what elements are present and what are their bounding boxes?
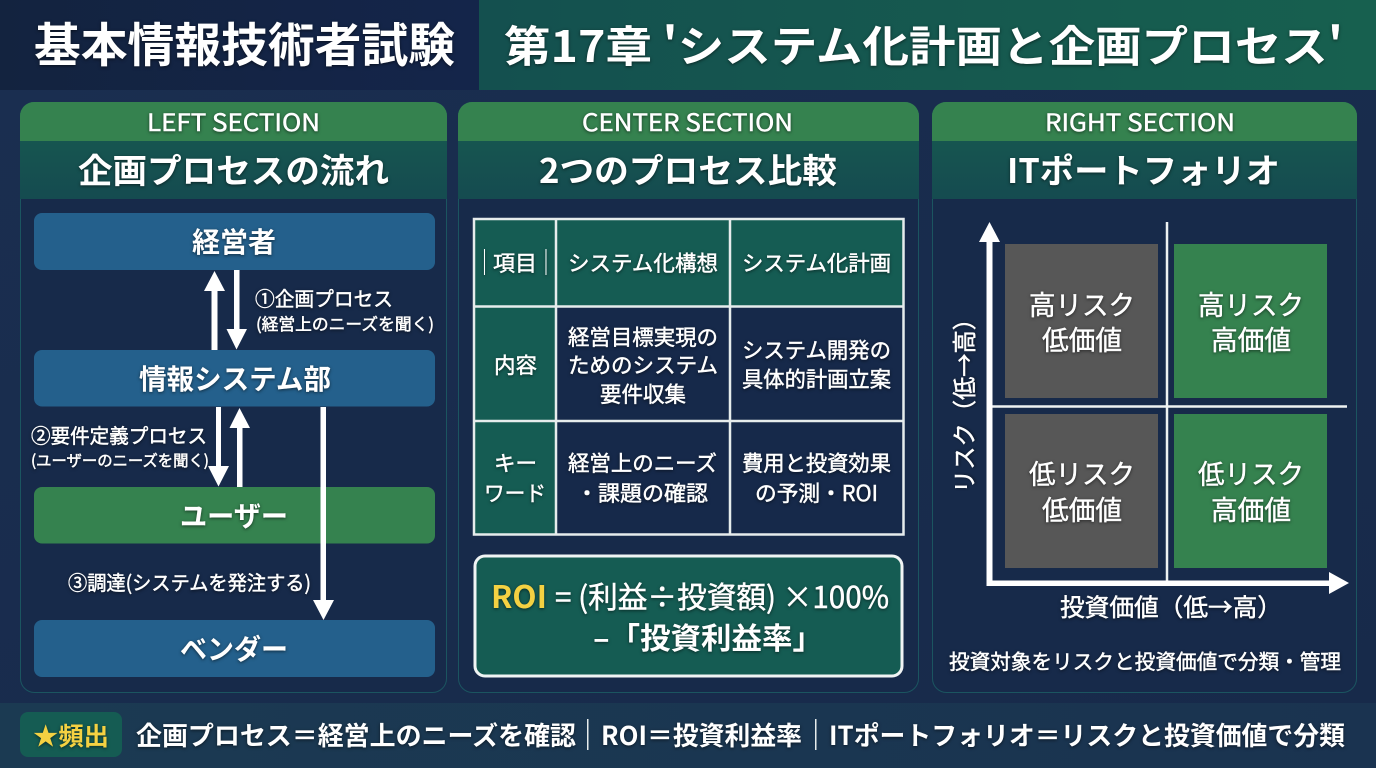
panel: left section	[20, 102, 447, 692]
arrow: down to ユーザー	[208, 407, 229, 486]
title: chapter: 第17章 'システム化計画と企画プロセス'	[504, 13, 1343, 75]
table header row: 項目	[493, 247, 537, 278]
table row: 内容: 要件収集	[600, 378, 686, 409]
label: 企画プロセス: ①企画プロセス	[255, 283, 393, 312]
table row: キーワード: の予測・ROI	[755, 477, 878, 508]
table row: キーワード: 費用と投資効果	[742, 447, 891, 478]
footer key point: ROI: ROI＝投資利益率	[601, 716, 802, 753]
header bar	[0, 0, 1376, 90]
quadrant: 高リスク高価値: 高リスク	[1198, 284, 1304, 323]
quadrant: 低リスク高価値	[1174, 414, 1327, 568]
axis label: value: 投資価値（低→高）	[1060, 589, 1282, 624]
callout: ROI formula	[475, 556, 902, 676]
footer bar	[0, 703, 1376, 768]
box: ユーザー: ユーザー	[180, 495, 288, 535]
quadrant: 高リスク低価値: 低価値	[1042, 319, 1122, 358]
box: 経営者: 経営者	[192, 221, 276, 261]
quadrant: 高リスク低価値: 高リスク	[1029, 284, 1135, 323]
section label: CENTER SECTION	[582, 103, 793, 138]
table header row	[471, 243, 891, 280]
quadrant: 高リスク低価値	[1005, 244, 1158, 398]
heading: 2つのプロセス比較	[539, 144, 837, 193]
table header row: システム化計画	[742, 247, 891, 278]
arrow: up to 情報システム部	[230, 408, 250, 487]
label: 企画プロセス: (経営上のニーズを聞く)	[256, 311, 434, 335]
arrow: risk axis	[979, 222, 1000, 586]
table row: キーワード: 経営上のニーズ	[568, 447, 717, 478]
box: 経営者	[34, 213, 435, 270]
badge: frequent	[20, 712, 122, 757]
heading: ITポートフォリオ	[1007, 144, 1280, 193]
label: 要件定義プロセス: ②要件定義プロセス	[31, 420, 207, 449]
table row: キーワード: ・課題の確認	[576, 477, 708, 508]
label: 調達: ③調達(システムを発注する)	[68, 567, 311, 596]
quadrant: 低リスク低価値: 低リスク	[1029, 453, 1135, 492]
heading: 企画プロセスの流れ	[78, 144, 389, 193]
table row: キーワード: キー	[494, 447, 537, 478]
caption: 投資対象をリスクと投資価値で分類・管理	[949, 645, 1341, 675]
footer key point: ITポートフォリオ: ITポートフォリオ＝リスクと投資価値で分類	[829, 716, 1345, 753]
table row: 内容: 内容	[494, 349, 537, 380]
arrow: up to 経営者	[204, 271, 225, 350]
title: exam name: 基本情報技術者試験	[34, 7, 455, 76]
arrow: down to 情報システム部	[226, 270, 247, 350]
callout: ROI formula: = (利益÷投資額) ×100%	[555, 573, 889, 617]
badge: frequent: ★頻出	[33, 717, 109, 753]
panel: center section	[458, 102, 919, 692]
label: 要件定義プロセス	[31, 420, 209, 471]
box: ベンダー: ベンダー	[180, 628, 288, 668]
table row: キーワード	[484, 447, 891, 508]
label: 要件定義プロセス: (ユーザーのニーズを聞く)	[31, 449, 209, 471]
arrow: down to ベンダー	[313, 407, 334, 620]
footer key point: 企画プロセス: 企画プロセス＝経営上のニーズを確認	[136, 716, 576, 753]
arrow: value axis	[987, 572, 1349, 594]
box: 情報システム部: 情報システム部	[139, 358, 331, 398]
table row: 内容	[494, 321, 891, 409]
quadrant: 高リスク高価値	[1174, 244, 1327, 398]
table header row: システム化構想	[568, 247, 718, 278]
section label: RIGHT SECTION	[1045, 103, 1235, 138]
quadrant: 低リスク低価値: 低価値	[1042, 489, 1122, 528]
axis label: risk: リスク（低→高）	[945, 307, 980, 493]
table row: 内容: 経営目標実現の	[568, 321, 718, 352]
label: 企画プロセス	[255, 283, 434, 335]
chart: IT portfolio matrix	[945, 222, 1349, 624]
section label: LEFT SECTION	[147, 103, 320, 138]
quadrant: 低リスク低価値	[1005, 414, 1158, 568]
panel: right section	[932, 102, 1357, 692]
callout: ROI formula: ROI	[491, 572, 547, 617]
table row: 内容: ためのシステム	[568, 349, 718, 380]
box: 情報システム部	[34, 350, 435, 406]
table row: キーワード: ワード	[484, 477, 546, 508]
quadrant: 高リスク高価値: 高価値	[1211, 319, 1291, 358]
quadrant: 低リスク高価値: 低リスク	[1198, 453, 1304, 492]
table row: 内容: システム開発の	[742, 334, 891, 365]
box: ユーザー	[34, 487, 435, 544]
quadrant: 低リスク高価値: 高価値	[1211, 489, 1291, 528]
table row: 内容: 具体的計画立案	[742, 363, 891, 394]
table header row: │	[533, 243, 559, 280]
comparison table	[471, 219, 904, 534]
callout: ROI formula: –「投資利益率」	[593, 614, 823, 658]
table header row: │	[471, 243, 498, 280]
box: ベンダー	[34, 620, 435, 677]
